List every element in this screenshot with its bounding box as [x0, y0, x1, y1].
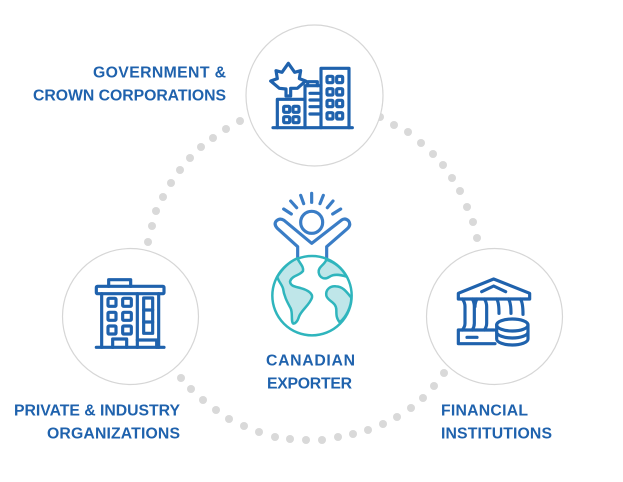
heading: canadian exporter: CANADIAN — [266, 352, 355, 370]
panel: government node — [246, 25, 383, 166]
icon: maple leaf and buildings — [271, 63, 352, 128]
panel: private industry node — [62, 248, 198, 384]
heading: government: CROWN CORPORATIONS — [33, 88, 226, 104]
heading: private industry: ORGANIZATIONS — [47, 426, 180, 442]
heading: private industry: PRIVATE & INDUSTRY — [14, 402, 180, 420]
panel: financial node — [426, 248, 562, 384]
node circle: private industry — [62, 248, 198, 384]
node circle: financial — [426, 248, 562, 384]
heading: government: GOVERNMENT & — [93, 64, 226, 82]
globe — [272, 256, 352, 335]
heading: financial: FINANCIAL — [441, 402, 528, 420]
heading: canadian exporter: EXPORTER — [267, 376, 353, 392]
dotted ring — [144, 113, 481, 444]
person — [275, 193, 350, 261]
icon: office building — [96, 280, 164, 347]
heading: financial: INSTITUTIONS — [441, 426, 552, 442]
icon: canadian exporter person on globe — [272, 193, 352, 335]
node circle: government — [246, 25, 383, 166]
icon: bank and coins — [458, 279, 530, 345]
